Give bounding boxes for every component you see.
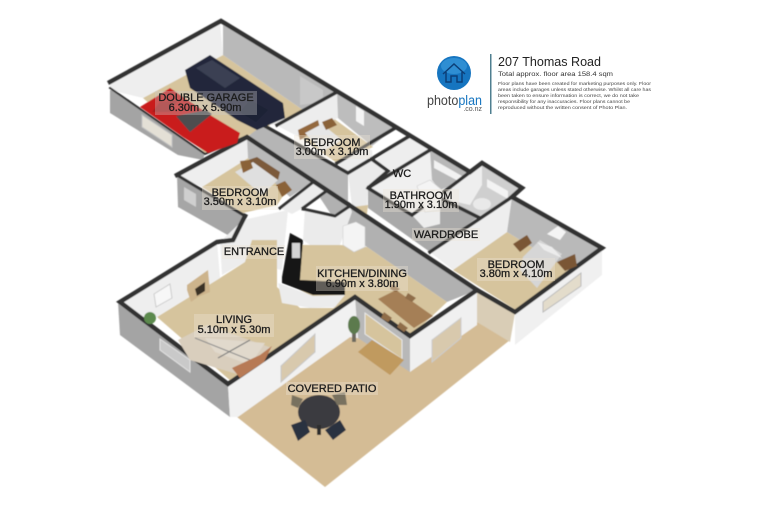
bedroom 3 front wall [177, 175, 245, 238]
bedroom 2 back wall [276, 92, 338, 136]
red car [140, 88, 240, 153]
header divider [490, 54, 492, 114]
label: double garage: DOUBLE GARAGE [158, 92, 254, 104]
dark car [185, 55, 285, 130]
bedroom 2 side wall [337, 92, 395, 146]
master outer wall [515, 247, 602, 345]
label: bedroom 3.50 x 3.10: BEDROOM [212, 187, 268, 199]
ensuite window [487, 179, 508, 199]
fireplace [187, 270, 210, 302]
label: bathroom: 1.90m x 3.10m [385, 199, 457, 211]
closet block [263, 112, 285, 125]
toilet [473, 198, 491, 210]
plant: patio [348, 316, 360, 342]
label: bedroom 3.50 x 3.10 [204, 187, 276, 208]
label: wardrobe: WARDROBE [414, 229, 478, 241]
outer wall: garage [110, 88, 205, 160]
WC room [375, 137, 430, 173]
logo: house badge [437, 56, 471, 90]
master side wall [507, 197, 603, 275]
patio window [365, 313, 402, 359]
garage window [142, 115, 172, 147]
label: master bedroom: BEDROOM [488, 259, 544, 271]
ensuite white wall [448, 163, 482, 205]
garage divider line [110, 88, 247, 154]
disclaimer: been taken to ensure information is correct, we do not take [498, 93, 640, 98]
label: double garage [158, 92, 254, 114]
front window [184, 187, 196, 207]
patio table and chairs [291, 392, 347, 441]
structural walls [110, 21, 602, 384]
label: WC: WC [393, 168, 411, 180]
bedroom 3 back wall [177, 138, 248, 187]
bathroom window [434, 160, 462, 183]
kitchen base [278, 283, 345, 308]
bed: bedroom 2 [298, 118, 342, 152]
label: bedroom 3.00 x 3.10: BEDROOM [304, 137, 360, 149]
disclaimer: areas include garages unless stated otherwise. Whilst all care has [498, 87, 652, 92]
label backgrounds [155, 91, 555, 395]
bedroom 2 window [356, 106, 364, 126]
kitchen counter [282, 233, 345, 295]
label: living [198, 314, 270, 336]
property title: 207 Thomas Road [498, 54, 601, 69]
bedroom 3 floor [202, 158, 287, 213]
entrance wall [220, 210, 288, 275]
patio white wall [228, 297, 358, 417]
disclaimer: reproduced without the written consent of Photo Plan. [498, 105, 627, 110]
disclaimer: Floor plans have been created for marketing purposes only. Floor [498, 81, 652, 86]
label: master bedroom: 3.80m x 4.10m [480, 268, 552, 280]
label: living: 5.10m x 5.30m [198, 324, 270, 336]
sofa [178, 325, 272, 378]
oven [292, 243, 300, 258]
patio bench [358, 340, 404, 375]
dining table [378, 284, 433, 332]
living floor [157, 240, 355, 382]
plant: living [144, 312, 156, 324]
label: kitchen/dining [317, 268, 407, 290]
bathroom floor [368, 150, 440, 215]
label: kitchen/dining: 6.90m x 3.80m [326, 278, 398, 290]
patio floor [237, 322, 510, 487]
bedroom 2 floor [297, 118, 373, 163]
label: bedroom 3.00 x 3.10 [296, 137, 368, 158]
living back wall [118, 242, 220, 318]
kitchen floor [300, 245, 447, 335]
living side window [160, 339, 190, 372]
fireplace opening [195, 282, 205, 296]
label: covered patio: COVERED PATIO [288, 383, 377, 395]
label: bedroom 3.00 x 3.10: 3.00m x 3.10m [296, 146, 368, 158]
bathroom wall [430, 150, 470, 190]
patio sliding door [432, 318, 461, 362]
floor area: Total approx. floor area 158.4 sqm [498, 71, 613, 78]
disclaimer: responsibility for any inaccuracies. Floor plans cannot be [498, 99, 630, 104]
label: bathroom [385, 190, 457, 211]
patio door [281, 334, 315, 382]
label: living: LIVING [216, 314, 252, 326]
living outer wall [118, 302, 230, 417]
hall floor [352, 205, 368, 222]
master door wall [477, 290, 515, 342]
living window [154, 284, 172, 307]
label: entrance: ENTRANCE [224, 246, 284, 258]
master outer window [543, 273, 581, 312]
label: double garage: 6.30m x 5.90m [169, 102, 241, 114]
garage back wall [110, 22, 223, 98]
label: kitchen/dining: KITCHEN/DINING [317, 268, 407, 280]
garage door panel [300, 76, 323, 105]
patio side wall [355, 297, 410, 372]
master floor [453, 232, 578, 310]
patio white wall right [410, 290, 477, 372]
outer back wall band [408, 137, 470, 185]
floor plan drawing [110, 20, 603, 487]
label: bedroom 3.50 x 3.10: 3.50m x 3.10m [204, 196, 276, 208]
bedroom 2 closet [337, 148, 373, 173]
wardrobe face [368, 188, 478, 252]
corridor door [348, 160, 388, 208]
bed: master [513, 226, 577, 288]
logo wordmark: .co.nz [463, 106, 482, 113]
toilet fixture: bathroom tub [417, 180, 442, 212]
corridor wall [247, 125, 348, 215]
garage floor [143, 55, 303, 153]
bed: bedroom 3 [235, 157, 292, 197]
label: master bedroom [480, 259, 552, 280]
disclaimer [498, 81, 652, 110]
master back wall [430, 197, 512, 270]
ensuite room [440, 163, 522, 217]
bedroom 3 side wall [247, 138, 312, 197]
garage side wall [223, 20, 337, 110]
wardrobe white unit [412, 198, 440, 228]
label: bathroom: BATHROOM [390, 190, 452, 202]
fridge [343, 222, 365, 252]
long wall face [305, 175, 477, 302]
logo wordmark: photoplan [427, 93, 482, 108]
hall closet [280, 183, 325, 214]
kitchen back wall [303, 206, 352, 245]
